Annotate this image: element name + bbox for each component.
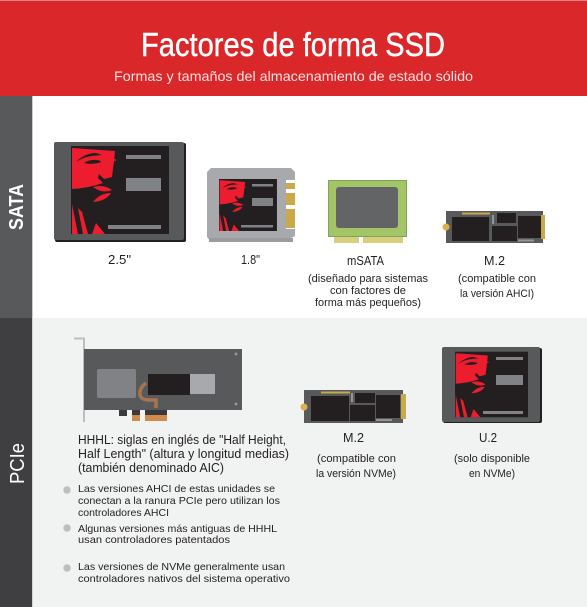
label: M.2 SATA: [458, 253, 536, 300]
label: U.2: [454, 430, 530, 480]
label: M.2 NVMe: [316, 430, 396, 480]
label: mSATA: mSATA: [347, 253, 384, 268]
label: mSATA: forma más pequeños): [315, 297, 421, 309]
label: mSATA: (diseñado para sistemas: [308, 273, 428, 285]
panel: PCIe background: [32, 318, 587, 607]
drive: U.2: [442, 347, 542, 423]
label: U.2: (solo disponible: [454, 453, 530, 465]
title: Factores de forma SSD: [141, 26, 445, 63]
drive: M.2 NVMe: [300, 390, 406, 423]
bullet: HHHL: [63, 523, 277, 546]
bullet: AHCI: conectan a la ranura PCIe pero utilizan los: [78, 495, 280, 507]
card: HHHL: [74, 338, 242, 422]
description: HHHL: HHHL: siglas en inglés de "Half Height,: [78, 433, 286, 447]
subtitle: Formas y tamaños del almacenamiento de estado sólido: [114, 68, 473, 84]
drive: M.2 SATA: [442, 211, 545, 243]
bullet: NVMe: [63, 561, 290, 585]
header banner: [0, 0, 587, 96]
label: mSATA: [308, 253, 428, 309]
bullet: NVMe: Las versiones de NVMe generalmente usan: [78, 561, 285, 573]
drive: 2.5 inch: [54, 142, 186, 242]
label: M.2 NVMe: M.2: [343, 430, 364, 445]
sidebar: SATA: SATA: [6, 184, 28, 230]
label: U.2: U.2: [479, 430, 497, 445]
bullet: HHHL: Algunas versiones más antiguas de HHHL: [78, 523, 277, 535]
drive: 1.8 inch: [207, 168, 295, 242]
label: M.2 SATA: (compatible con: [458, 273, 536, 285]
label: M.2 SATA: M.2: [484, 253, 505, 268]
label: U.2: en NVMe): [469, 468, 515, 480]
bullet: HHHL: usan controladores patentados: [78, 534, 230, 546]
label: 2.5 inch: 2.5": [108, 252, 131, 267]
sidebar: PCIe: [0, 318, 33, 607]
label: 1.8 inch: 1.8": [241, 252, 260, 267]
label: mSATA: con factores de: [330, 285, 406, 297]
label: M.2 NVMe: (compatible con: [317, 453, 396, 465]
sidebar: PCIe: PCIe: [7, 443, 29, 484]
drive: mSATA: [328, 180, 407, 243]
bullet: AHCI: Las versiones AHCI de estas unidades se: [78, 483, 275, 495]
description: HHHL: (también denominado AIC): [78, 461, 224, 475]
bullet: AHCI: [63, 483, 280, 519]
label: M.2 SATA: la versión AHCI): [460, 288, 534, 300]
sidebar: SATA: [0, 96, 33, 318]
description: HHHL: [78, 433, 289, 475]
label: M.2 NVMe: la versión NVMe): [316, 468, 396, 480]
bullet: AHCI: controladores AHCI: [78, 507, 169, 519]
description: HHHL: Half Length" (altura y longitud medias): [78, 447, 289, 461]
bullet: NVMe: controladores nativos del sistema operativo: [78, 573, 290, 585]
